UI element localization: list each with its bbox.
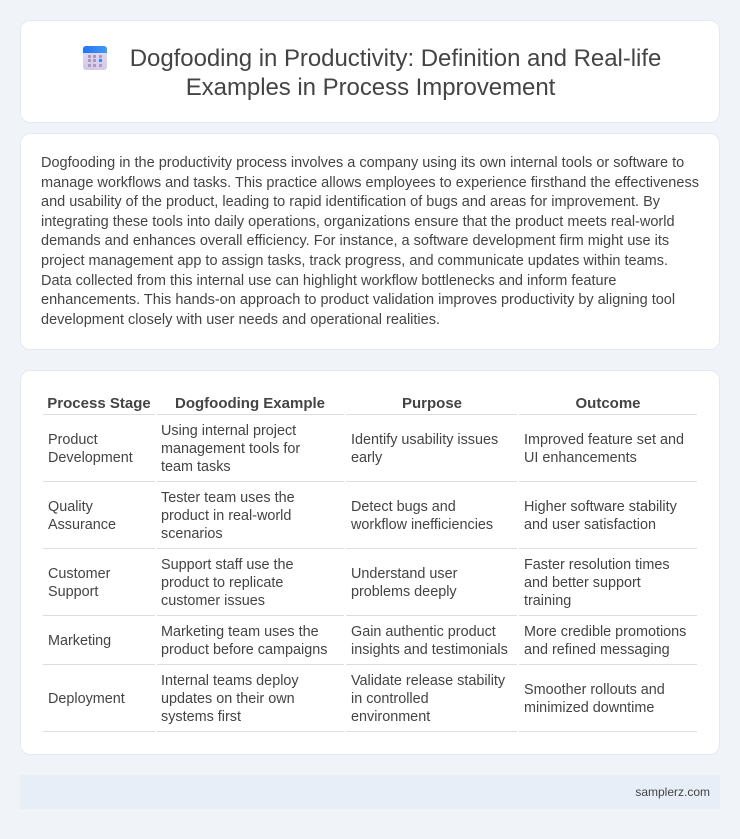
row: quality assurance: Detect bugs and (351, 499, 456, 515)
panel: table (20, 370, 720, 755)
footer text: samplerz.com (635, 785, 710, 799)
row: quality assurance: Assurance (48, 517, 116, 533)
panel: description (20, 133, 720, 350)
row: product development: Improved feature set and (524, 432, 684, 448)
row: customer support: Customer (48, 566, 110, 582)
row: deployment: environment (351, 709, 430, 725)
row: deployment: Internal teams deploy (161, 673, 299, 689)
row: marketing: Marketing team uses the (161, 624, 319, 640)
table header: Process Stage (47, 395, 151, 412)
text block: description: demands and enhances overall efficiency. For instance, a software development firm might use its (41, 233, 669, 249)
text block: description: Dogfooding in the productivity process involves a company using its own internal tools or software to (41, 155, 684, 171)
row: marketing: product before campaigns (161, 642, 327, 658)
row: customer support: customer issues (161, 593, 265, 609)
row: deployment: Validate release stability (351, 673, 505, 689)
text block: description: and usability of the product, leading to rapid identification of bugs and areas for improvement. By (41, 194, 660, 210)
table header: Dogfooding Example (175, 395, 325, 412)
row: deployment: updates on their own (161, 691, 295, 707)
text block: description: Data collected from this internal use can highlight workflow bottlenecks and inform feature (41, 273, 616, 289)
title (130, 45, 661, 101)
row: quality assurance: workflow inefficiencies (351, 517, 493, 533)
row: customer support: Understand user (351, 566, 457, 582)
text block: description: development closely with user needs and operational realities. (41, 312, 440, 328)
table header: Outcome (575, 395, 641, 412)
row: deployment: Deployment (48, 691, 125, 707)
row: customer support: Support (48, 584, 98, 600)
row: customer support: and better support (524, 575, 641, 591)
row: product development (48, 423, 684, 475)
table header: Purpose (402, 395, 462, 412)
row: marketing: and refined messaging (524, 642, 670, 658)
row: product development: Identify usability issues (351, 432, 498, 448)
row: quality assurance (48, 490, 677, 542)
row: customer support (48, 557, 670, 609)
row: quality assurance: Tester team uses the (161, 490, 295, 506)
row: marketing: Gain authentic product (351, 624, 496, 640)
text block: description: manage workflows and tasks. This practice allows employees to experience firsthand the effectiveness (41, 175, 699, 191)
row: customer support: Support staff use the (161, 557, 294, 573)
row: customer support: problems deeply (351, 584, 457, 600)
row: quality assurance: scenarios (161, 526, 223, 542)
row: quality assurance: Quality (48, 499, 93, 515)
row: customer support: product to replicate (161, 575, 283, 591)
row: product development: Product (48, 432, 98, 448)
row: marketing: insights and testimonials (351, 642, 508, 658)
row: deployment: Smoother rollouts and (524, 682, 665, 698)
footer bar (20, 775, 720, 809)
row: product development: UI enhancements (524, 450, 637, 466)
row: product development: management tools for (161, 441, 300, 457)
text block: description: project management app to assign tasks, track progress, and communicate updates within teams. (41, 253, 668, 269)
title: Examples in Process Improvement (186, 74, 555, 101)
row: product development: team tasks (161, 459, 231, 475)
row: deployment: minimized downtime (524, 700, 654, 716)
row: customer support: training (524, 593, 571, 609)
title: Dogfooding in Productivity: Definition and Real-life (130, 45, 661, 72)
row: deployment: in controlled (351, 691, 429, 707)
row: marketing: Marketing (48, 633, 111, 649)
table rows (43, 414, 697, 732)
row: marketing: More credible promotions (524, 624, 686, 640)
row: quality assurance: Higher software stability (524, 499, 677, 515)
row: deployment (48, 673, 665, 725)
row: marketing (48, 624, 686, 658)
text block: description: integrating these tools into daily operations, organizations ensure that the product meets real-world (41, 214, 675, 230)
text block: description: enhancements. This hands-on approach to product validation improves productivity by aligning tool (41, 292, 675, 308)
row: product development: Development (48, 450, 133, 466)
row: deployment: systems first (161, 709, 241, 725)
row: quality assurance: product in real-world (161, 508, 291, 524)
row: quality assurance: and user satisfaction (524, 517, 656, 533)
row: customer support: Faster resolution times (524, 557, 670, 573)
table header (47, 395, 641, 412)
text block: description (41, 155, 699, 328)
row: product development: early (351, 450, 382, 466)
row: product development: Using internal project (161, 423, 296, 439)
header panel (20, 20, 720, 123)
icon: calendar (83, 46, 107, 70)
